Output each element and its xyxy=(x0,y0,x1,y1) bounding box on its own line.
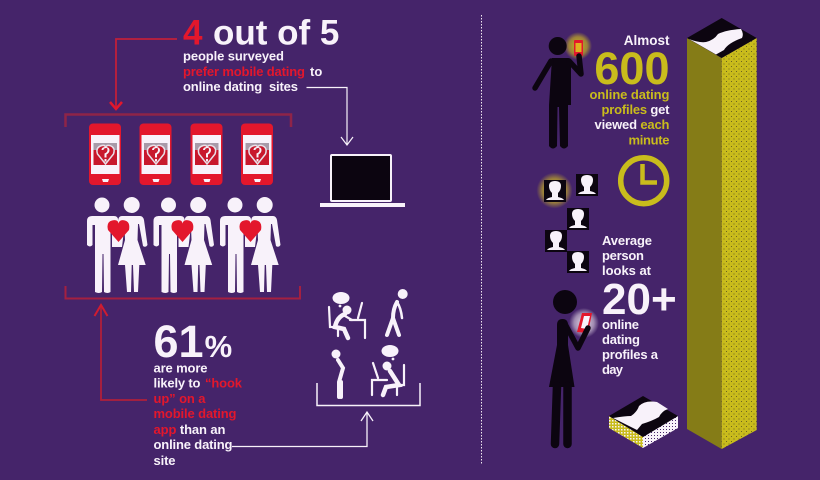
icon: small column bar xyxy=(609,396,678,448)
text block: online dating profiles a day: dating xyxy=(602,332,640,347)
text block: hook up xyxy=(154,360,243,468)
text block: hook up: mobile dating xyxy=(154,406,237,421)
text block: average person xyxy=(602,233,652,278)
text block: hook up: app than an xyxy=(154,422,226,437)
heading: 4 out of 5: 4 xyxy=(183,14,203,52)
text: Almost: Almost xyxy=(624,33,670,48)
text block: online dating profiles: viewed each xyxy=(594,117,670,132)
arrow: 61% to people xyxy=(94,305,147,400)
profile silhouettes xyxy=(536,172,598,273)
text block: online dating profiles: minute xyxy=(628,132,670,148)
statistic: 20+: 20+ xyxy=(602,275,677,324)
icon: person at desk thinking, mirrored xyxy=(372,345,404,395)
icon: laptop xyxy=(320,155,405,207)
text block: people surveyed: prefer mobile dating xyxy=(183,64,305,79)
arrow: 4 out of 5 to phones xyxy=(110,39,177,109)
arrow: text to desktop users xyxy=(232,412,373,446)
center divider xyxy=(480,15,482,465)
statistic: 61%: 61% xyxy=(154,316,232,367)
icon: person at desk thinking xyxy=(329,292,365,338)
text block: average person: person xyxy=(602,248,644,263)
text block: hook up: site xyxy=(154,453,176,468)
icon: person at desk thinking: ? xyxy=(338,294,344,304)
bracket: bottom xyxy=(66,286,300,298)
text block: people surveyed xyxy=(183,48,322,94)
text block: online dating profiles: profiles get xyxy=(602,102,670,117)
text block: online dating profiles: online dating xyxy=(590,87,670,102)
text block: online dating profiles a day: profiles a xyxy=(602,347,659,362)
text block: hook up: “hook xyxy=(205,376,243,390)
text block: people surveyed: people surveyed xyxy=(183,48,284,64)
bracket: top xyxy=(66,114,291,127)
icon: man with phone xyxy=(535,32,592,148)
text block: hook up: are more xyxy=(154,360,208,376)
statistic: 600: 600 xyxy=(594,43,670,94)
heading: 4 out of 5: out of 5 xyxy=(213,14,339,52)
icon row: four phones xyxy=(89,124,273,185)
text block: people surveyed: online dating sites xyxy=(183,79,298,94)
text block: online dating profiles a day: online xyxy=(602,317,639,332)
text block: hook up: online dating xyxy=(154,437,233,452)
icon: woman with phone xyxy=(549,290,599,444)
bracket: desktop users xyxy=(317,383,420,406)
text block: hook up: likely to xyxy=(154,376,201,390)
icon: person walking sad xyxy=(387,289,408,335)
icon: person standing sad xyxy=(332,350,343,397)
text block: online dating profiles xyxy=(590,87,670,148)
icon: tall column bar xyxy=(687,18,757,449)
people: three couples with hearts xyxy=(87,197,280,293)
text block: average person: looks at xyxy=(602,263,652,278)
arrow: text to laptop xyxy=(306,88,353,145)
text block: people surveyed: to xyxy=(310,64,322,79)
text block: online dating profiles a day: day xyxy=(602,362,624,377)
text block: hook up: up” on a xyxy=(154,391,206,406)
icon: person at desk thinking, mirrored: ? xyxy=(388,346,393,356)
text block: online dating profiles a day xyxy=(602,317,659,377)
icon: clock xyxy=(621,158,667,204)
text block: average person: Average xyxy=(602,233,652,248)
